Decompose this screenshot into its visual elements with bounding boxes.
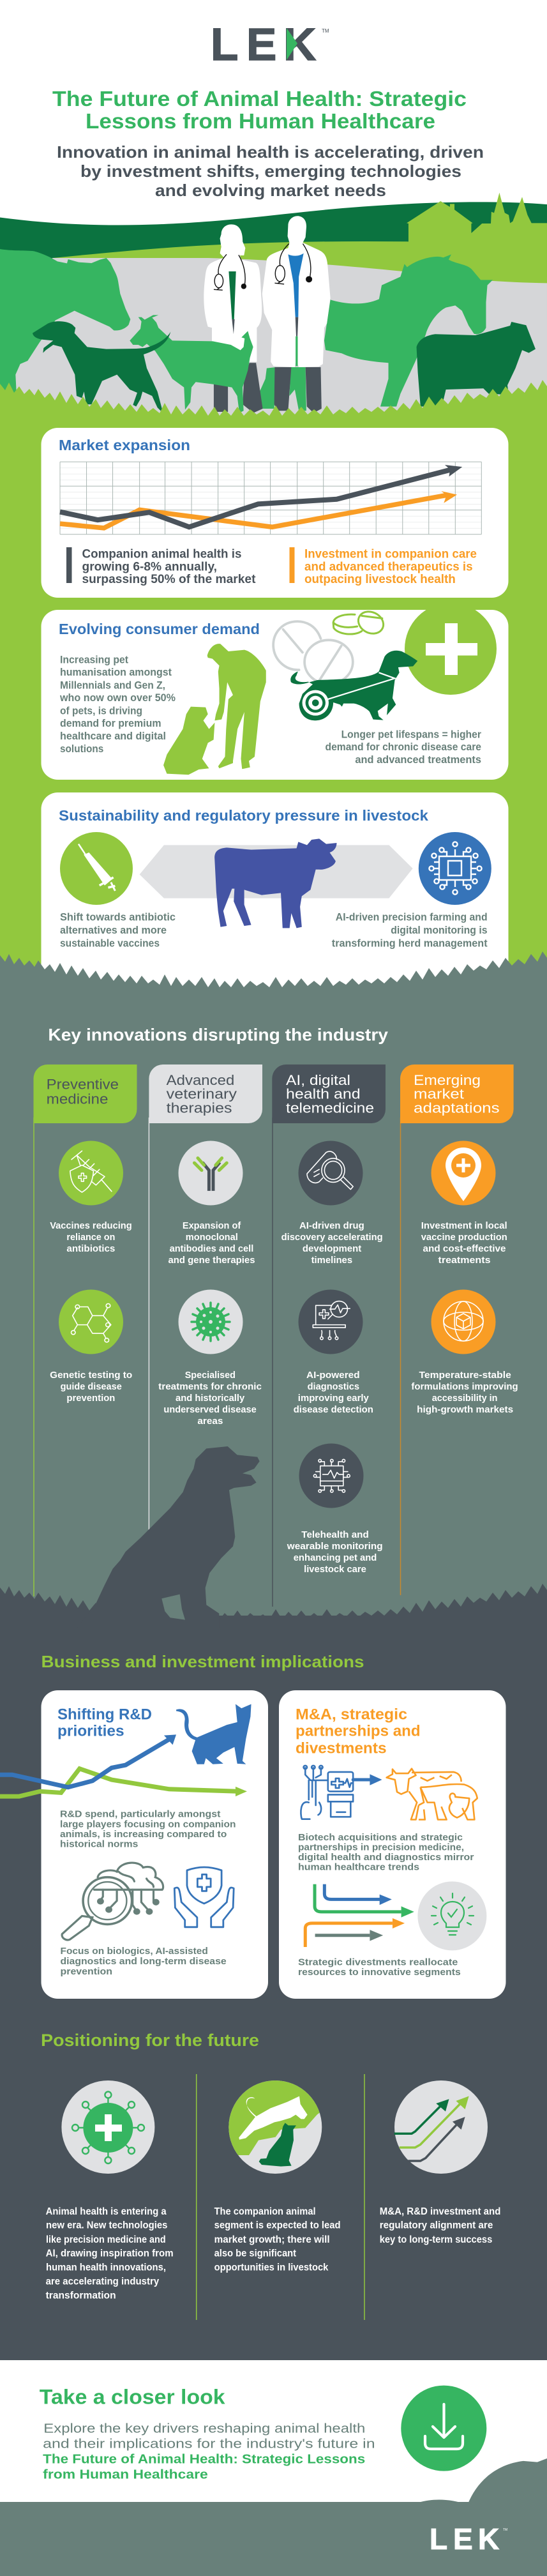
text block: companion segment: market growth; there will [214,2234,330,2245]
icon: new era network cross [61,2080,154,2174]
text block: The Future of Animal Health: Strategic Lessons [43,2452,365,2466]
text block: col 1 row 2 [50,1370,132,1404]
text block: new era: AI, drawing inspiration from [46,2248,174,2259]
text block: col 1 row 2: guide disease [61,1381,122,1392]
text block: success keys: regulatory alignment are [380,2220,493,2231]
text block: col 1 row 1: reliance on [66,1232,115,1243]
icon: antibody [179,1140,243,1206]
text block [298,1832,474,1872]
tab: AI digital health and telemedicine: telemedicine [286,1100,374,1116]
text block: col 2 row 2: Specialised [185,1370,236,1381]
text block: col 1 row 1: antibiotics [66,1243,115,1254]
logo: LEK header: L [211,20,238,70]
text block: col 2 row 1 [169,1220,255,1266]
text block: col 2 row 2: underserved disease [163,1404,257,1415]
icon: medical cross, pills and wheelchair dog [273,603,497,720]
text block: animals, is increasing compared to [60,1829,227,1840]
logo: LEK footer: TM [503,2528,507,2532]
text block: from Human Healthcare [43,2467,208,2481]
text block: companion segment [214,2206,341,2273]
tab: preventive medicine: medicine [47,1091,108,1107]
animal: goat [130,315,253,413]
logo: LEK header: TM [322,28,329,34]
icon: vaccine shield [59,1140,123,1206]
panel: M&A, strategic partnerships and divestments [279,1690,506,1999]
tab: advanced veterinary therapies: Advanced [167,1072,234,1088]
text block: transforming herd management [332,937,488,949]
key stat: companion growth: surpassing 50% of the market [82,573,256,586]
text block: col 4 row 1: treatments [438,1255,490,1266]
dog silhouette gap [161,1595,185,1620]
animal: horse [324,254,493,407]
text block: col 1 row 2: prevention [66,1393,115,1404]
text block: Strategic divestments reallocate [298,1957,458,1968]
text block: col 4 row 2: formulations improving [411,1381,518,1392]
logo: LEK header: K [283,20,316,70]
logo: LEK header: E [246,20,276,70]
text block: success keys: M&A, R&D investment and [380,2206,500,2217]
logo: LEK footer: K [478,2522,499,2556]
icon: syringe [60,832,133,905]
text block: healthcare and digital [60,731,166,742]
text block [43,2421,375,2481]
text block: col 4 row 1: and cost-effective [423,1243,506,1254]
text block: historical norms [60,1838,138,1849]
tab: advanced veterinary therapies: therapies [167,1100,232,1116]
heading: partnerships and [296,1723,421,1739]
text block: col 4 row 1: Investment in local [421,1220,507,1231]
icon: livestock outline [387,1769,477,1820]
text block: success keys: key to long-term success [380,2234,492,2245]
panel: sustainability and regulatory pressure [41,792,508,1003]
call to action: take a closer look [40,2385,486,2481]
panel: evolving consumer demand [41,603,508,780]
text block: col 3 row 2 [294,1370,373,1415]
separators [197,2074,364,2320]
text block: col 1 row 1: Vaccines reducing [50,1220,132,1231]
text block: large players focusing on companion [60,1819,236,1830]
text block: col 3 row 3: enhancing pet and [294,1552,377,1563]
text block: col 4 row 2: high-growth markets [417,1404,513,1415]
text block: col 3 row 2: disease detection [294,1404,373,1415]
text block: col 3 row 1 [281,1220,383,1266]
text block: and advanced treatments [355,754,481,766]
text block: col 2 row 1: antibodies and cell [170,1243,253,1254]
text block: col 2 row 2: and historically [176,1393,245,1404]
text block [298,1957,461,1978]
subtitle: by investment shifts, emerging technologies [80,162,461,181]
text block: col 2 row 2: treatments for chronic [158,1381,262,1392]
text block: col 3 row 1: development [303,1243,361,1254]
text block [326,729,482,766]
heading: M&A, strategic [296,1706,407,1723]
text block: col 1 row 1 [50,1220,132,1254]
heading: Evolving consumer demand [59,621,260,637]
field: grey [0,258,547,426]
text block: col 2 row 1: and gene therapies [169,1255,255,1266]
text block [332,911,488,949]
tab: preventive medicine [33,1064,137,1123]
icon: lightbulb [417,1881,486,1950]
icon: cow [214,838,336,928]
column rules [34,1118,401,1607]
tab: emerging market adaptations: Emerging [414,1072,481,1088]
text block: R&D spend, particularly amongst [60,1809,220,1820]
text block: and their implications for the industry's future in [43,2437,375,2451]
person: male vet [259,216,331,413]
icon: owner and dog [163,644,266,775]
heading: Sustainability and regulatory pressure in livestock [59,807,428,824]
hill: dark green [0,202,547,277]
icon: drug discovery magnifier [299,1140,363,1206]
text block: who now own over 50% [59,692,176,704]
text block: col 4 row 2: accessibility in [432,1393,498,1404]
text block: Increasing pet [60,654,128,665]
text block: digital monitoring is [391,924,488,936]
text block: new era: are accelerating industry [46,2276,160,2287]
heading [296,1706,421,1757]
tab: emerging market adaptations: market [414,1086,464,1102]
text block: new era: like precision medicine and [46,2234,166,2245]
text block: col 3 row 3: livestock care [304,1564,366,1575]
text block: Explore the key drivers reshaping animal health [43,2421,365,2436]
hexagon band [140,845,413,898]
heading: Take a closer look [40,2385,225,2408]
icon: cat [176,1704,251,1764]
text block: new era: human health innovations, [46,2262,166,2273]
text block: col 3 row 1: timelines [311,1255,352,1266]
person: female vet [204,224,263,413]
key stat: investment: Investment in companion care [304,548,477,561]
footer cloud shape [419,2459,547,2515]
panel: shifting R&D priorities [0,1690,268,1999]
text block: col 1 row 2: Genetic testing to [50,1370,132,1381]
grass: grey-green divider [0,951,547,1015]
text block [60,1809,236,1849]
text block: col 3 row 2: diagnostics [308,1381,359,1392]
text block: humanisation amongst [60,667,172,678]
icon: globe with cube [431,1290,495,1354]
logo: LEK footer [430,2522,507,2556]
text block: col 4 row 1: vaccine production [421,1232,507,1243]
icon: rising arrows [394,2080,488,2174]
key stat: investment: and advanced therapeutics is [304,560,473,573]
text block: success keys [380,2206,500,2245]
tab: emerging market adaptations: adaptations [414,1100,500,1116]
text block: col 3 row 2: AI-powered [306,1370,360,1381]
heading: Shifting R&D [57,1706,152,1723]
text block: resources to innovative segments [298,1967,461,1978]
hill and farmhouse: light green [52,193,547,319]
text block: new era: new era. New technologies [46,2220,167,2231]
text block: col 4 row 2: Temperature-stable [419,1370,511,1381]
text block [59,654,176,755]
heading: key innovations: Key innovations disrupting the industry [48,1025,388,1044]
icon: hands holding shield [174,1867,234,1927]
text block: col 4 row 2 [411,1370,518,1415]
text block: sustainable vaccines [60,937,160,949]
key stat: companion growth: growing 6-8% annually, [82,560,217,573]
title [52,87,467,133]
text block [60,911,176,949]
logo: LEK footer: L [430,2522,447,2556]
tab: advanced veterinary therapies [149,1064,262,1123]
heading: divestments [296,1739,387,1757]
animal: sheep [417,322,536,407]
heading: business and investment implications: Business and investment implications [41,1652,364,1671]
icon: magnifier over brain cloud [62,1863,163,1940]
text block: companion segment: segment is expected to lead [214,2220,341,2231]
text block: col 2 row 1: monoclonal [186,1232,238,1243]
text block: new era: transformation [46,2291,116,2301]
title: Lessons from Human Healthcare [86,109,435,133]
tab: emerging market adaptations [400,1064,514,1123]
subtitle: Innovation in animal health is accelerating, driven [57,142,484,162]
text block: partnerships in precision medicine, [298,1842,464,1853]
illustration: farm landscape with vets and animals [0,193,547,444]
text block: companion segment: The companion animal [214,2206,316,2217]
icon: device with arrow [301,1766,382,1819]
icon: virus [179,1290,243,1354]
subtitle: and evolving market needs [155,181,386,200]
text block: solutions [60,743,103,755]
illustration: sitting dog silhouette [77,1446,260,1628]
icon: reallocation arrows [305,1884,414,1947]
icon: AI diagnostics laptop [299,1290,363,1354]
text block: Longer pet lifespans = higher [341,729,482,740]
text block: AI-driven precision farming and [336,911,488,923]
tab: advanced veterinary therapies: veterinary [167,1086,237,1102]
text block: col 2 row 1: Expansion of [183,1220,241,1231]
text block: companion segment: also be significant [214,2248,296,2259]
key stat: investment: outpacing livestock health [304,573,456,586]
key stat: investment [290,547,477,586]
panel: market expansion [41,428,508,598]
text block: alternatives and more [60,924,167,936]
text block: Millennials and Gen Z, [60,679,165,691]
text block: demand for chronic disease care [326,741,481,753]
heading: priorities [57,1723,124,1739]
icon: molecule [59,1290,123,1354]
text block: col 3 row 3 [287,1529,383,1575]
text block: digital health and diagnostics mirror [298,1852,474,1863]
tab: AI digital health and telemedicine: AI, digital [286,1072,350,1088]
key stat: companion growth [66,547,256,586]
text block: col 3 row 3: wearable monitoring [287,1541,383,1552]
line chart [60,462,481,534]
tab: AI digital health and telemedicine [272,1064,386,1123]
heading [57,1706,152,1739]
text block: col 4 row 1 [421,1220,507,1266]
text block: new era: Animal health is entering a [46,2206,167,2217]
subtitle [57,142,484,200]
text block: col 3 row 1: AI-driven drug [299,1220,364,1231]
text block: prevention [60,1966,112,1977]
grass: green foreground [0,380,547,444]
text block: Focus on biologics, AI-assisted [60,1946,208,1957]
title: The Future of Animal Health: Strategic [52,87,467,110]
text block: col 2 row 2 [158,1370,262,1427]
text block: companion segment: opportunities in livestock [214,2262,329,2273]
text block: of pets, is driving [60,705,142,716]
text block: human healthcare trends [298,1861,419,1872]
text block: col 3 row 3: Telehealth and [301,1529,369,1540]
animal: cow head [0,249,130,396]
icon: cat leaping over dog [225,2077,324,2174]
text block: col 2 row 2: areas [197,1416,223,1427]
icon: download [401,2386,486,2471]
text block: demand for premium [60,718,161,729]
text block: col 3 row 1: discovery accelerating [281,1232,383,1243]
heading: Market expansion [59,437,190,453]
key stat: companion growth: Companion animal health is [82,548,241,561]
tab: preventive medicine: Preventive [47,1077,119,1093]
text block: new era [46,2206,174,2301]
chart: trend lines with arrows [0,1734,247,1796]
icon: AI chip [419,832,491,905]
heading: positioning for the future: Positioning for the future [41,2031,259,2050]
icon: wearable monitor chip [299,1443,364,1508]
logo: LEK footer: E [453,2522,473,2556]
text block: Shift towards antibiotic [60,911,176,923]
text block [60,1946,227,1977]
text block: col 3 row 2: improving early [298,1393,369,1404]
tab: AI digital health and telemedicine: health and [286,1086,361,1102]
animal: dog [33,321,170,413]
text block: Biotech acquisitions and strategic [298,1832,463,1843]
text block: diagnostics and long-term disease [60,1956,227,1967]
icon: location pin [431,1140,495,1206]
grass: dark divider [0,1584,547,1648]
logo: LEK header [211,20,329,70]
